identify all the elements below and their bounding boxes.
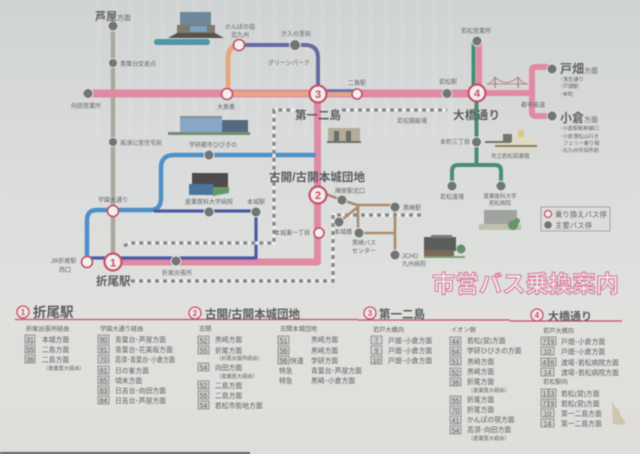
stop: Wakamatsu station xyxy=(442,88,452,98)
heading text 1: 折尾駅 xyxy=(33,304,74,320)
Gakuen Odori list: 学園大通り経由 xyxy=(100,325,143,333)
Furuhiraki Honjo danchi list: 古開本城団地 xyxy=(280,325,317,333)
timetable: section 4 Ohashi Dori xyxy=(510,309,622,428)
stop: Takasu housing xyxy=(108,138,118,146)
legend: 主要バス停 xyxy=(555,221,593,230)
stop: Gakken upper xyxy=(204,150,214,160)
Wakato bridge list: 10 xyxy=(373,358,380,365)
hub 2 Furuhiraki: 2 xyxy=(315,190,321,202)
Wakato bridge list: 若戸大橋向 xyxy=(543,327,574,335)
Furuhiraki Honjo danchi list: 黒崎方面 xyxy=(311,335,338,344)
stop label: Gakuen Odori: 学園大通り xyxy=(98,196,128,204)
stop: Honjobashi xyxy=(334,217,344,227)
stop: medical university xyxy=(204,207,214,217)
stop label: JCHO Kyushu xyxy=(402,254,426,268)
stop label: JR Orio xyxy=(51,257,76,274)
stop: Tobata xyxy=(547,64,557,74)
hub name: Daiichi Nishima: 第一二島 xyxy=(295,108,341,122)
stop: Kokura xyxy=(547,111,557,121)
Wakamatsu station list: 1 xyxy=(543,391,547,398)
stop label: University hospital: 若松病院 xyxy=(489,199,511,207)
Furuhiraki Honjo danchi list: 56 xyxy=(280,358,287,365)
Furuhiraki list: 55 xyxy=(200,393,207,400)
Purple route xyxy=(239,45,318,92)
icon: bridge xyxy=(487,77,528,88)
Furuhiraki list: 向田方面 xyxy=(215,363,242,372)
Aeon side list: 黒崎方面 xyxy=(467,357,494,366)
Kokura details: ･小倉駅新幹線口 xyxy=(560,124,599,132)
hub 3 Daiichi Nishima xyxy=(310,86,326,102)
Gakuen Odori list xyxy=(98,325,175,405)
Wakato bridge list xyxy=(541,327,619,377)
Orange section near Nishima xyxy=(322,93,355,96)
Furuhiraki Honjo danchi list: 学研方面 xyxy=(311,356,338,365)
Gakuen Odori list: 90 xyxy=(100,337,107,344)
transfer stop: Honjo Higashi xyxy=(314,228,324,238)
Aeon side list: 高須･向田方面 xyxy=(467,425,511,434)
Furuhiraki list: 52 xyxy=(200,338,207,345)
Furuhiraki list: 二島方面 xyxy=(215,381,242,390)
Furuhiraki list: 折尾方面 xyxy=(215,346,242,355)
Orio branch list: 折尾出張所経由 xyxy=(26,325,69,333)
Gakuen Odori list: 日の峯方面 xyxy=(115,366,149,375)
Furuhiraki list: 古開 xyxy=(199,325,211,333)
Lower dashed rail line xyxy=(131,215,422,281)
Aeon side list: 学研ひびきの方面 xyxy=(467,346,522,355)
stop label: Wakamatsu ferry: 若松渡場 xyxy=(440,193,464,201)
Furuhiraki Honjo danchi list: 特急 xyxy=(279,366,293,375)
Furuhiraki Honjo danchi list: 快速 xyxy=(290,356,304,365)
heading badge 3: 3 xyxy=(368,309,373,318)
building: Wakamatsu library xyxy=(485,130,537,152)
heading badge 2: 2 xyxy=(193,309,198,318)
Wakato bridge list: 4 xyxy=(543,360,547,367)
heading text 4: 大橋通り xyxy=(548,309,592,323)
stop: Aobadai xyxy=(108,58,118,68)
stop: Orio branch xyxy=(171,256,181,266)
timetable: section 3 Daiichi Nishima xyxy=(358,307,522,442)
building: Industrial medical university hospital xyxy=(189,173,229,196)
Wakamatsu station list: 3 xyxy=(551,391,555,398)
Orio branch list: 二島方面 xyxy=(42,345,69,354)
hub 4 Ohashi Dori: 4 xyxy=(474,88,481,100)
stop: JCHO xyxy=(390,250,400,260)
transfer stop: Nishima station xyxy=(352,89,362,99)
Furuhiraki list xyxy=(198,325,263,410)
hub name: Ohashi Dori: 大橋通り xyxy=(453,108,500,122)
stop: Kurosaki bus center xyxy=(354,228,364,238)
stop label: Wakamatsu depot: 若松営業所 xyxy=(461,27,491,35)
transfer stop: JR Orio west exit xyxy=(82,256,92,268)
direction: Tobata: 戸畑方面 xyxy=(560,62,598,76)
stop label: Green Park: グリーンパーク xyxy=(268,59,310,67)
stop label: Kurosaki bus center: 黒崎バス xyxy=(352,239,376,247)
stop label: Honmachi: 本町三丁目 xyxy=(440,138,470,146)
heading line 2 xyxy=(185,318,358,320)
Wakamatsu station list: 若松駅向 xyxy=(543,378,568,386)
hub name: Orio: 折尾駅 xyxy=(96,274,131,288)
heading badge 3 xyxy=(364,307,376,319)
Wakato bridge list: 14 xyxy=(544,370,551,377)
Aeon side list xyxy=(450,326,522,442)
Wakamatsu station list: 若松(営)方面 xyxy=(561,399,600,408)
stop label: Kurosaki bus center xyxy=(352,239,376,255)
Aeon side list: 70 xyxy=(452,408,459,415)
stop label: University hospital: 産業医科大学 xyxy=(483,192,517,200)
stop label: JR Orio: 西口 xyxy=(59,267,71,274)
Aeon side list: 54 xyxy=(452,428,459,435)
Gakuen Odori list: 日吉台･向田方面 xyxy=(115,386,166,395)
Furuhiraki Honjo danchi list: 特急 xyxy=(279,376,293,385)
stop label: University hospital xyxy=(483,192,517,207)
Kokura details: ･北九州市役所前 xyxy=(560,146,599,154)
Brown routes xyxy=(320,192,395,255)
Dark blue branch xyxy=(90,211,256,258)
Aeon side list: 55 xyxy=(452,398,459,405)
Wakamatsu station list: 第一二島方面 xyxy=(561,419,602,428)
Wakato bridge list: 7 xyxy=(543,339,547,346)
Gakuen Odori list: 日吉台･芦屋方面 xyxy=(115,396,166,405)
Furuhiraki list: 黒崎方面 xyxy=(215,335,242,344)
building: JCHO Kyushu hospital xyxy=(424,235,466,258)
building: Gakken Toshi Hibikino xyxy=(168,116,250,135)
Furuhiraki Honjo danchi list: 青葉台･芦屋方面 xyxy=(311,366,362,375)
heading line 1 xyxy=(15,318,185,320)
faded stripe texture xyxy=(95,0,465,135)
stop label: Kanbara north: 陣原駅北口 xyxy=(335,187,365,195)
Gakuen Odori list: 青葉台･花美坂方面 xyxy=(115,345,173,354)
stop: Aoba junction xyxy=(108,21,118,31)
Aeon side list: （産業医大経由） xyxy=(468,386,510,394)
Gakuen Odori list: 91 xyxy=(100,347,107,354)
heading badge 2 xyxy=(189,307,201,319)
heading badge 4: 4 xyxy=(535,311,540,320)
Tobata details xyxy=(560,75,584,98)
title: 市営バス乗換案内 xyxy=(432,271,619,297)
Furuhiraki list: 54 xyxy=(200,365,207,372)
Gakuen Odori list: 高須･青葉台･小倉方面 xyxy=(115,355,175,364)
stop label: Shionoiri: 汐入の里前 xyxy=(281,30,311,38)
stop label: Medical university: 産業医科大学病院 xyxy=(185,198,233,206)
stop label: Gakken Toshi: 学研都市ひびきの xyxy=(189,141,237,149)
stop label: Toshi Kosoku: 都市高速 xyxy=(521,101,545,109)
stop: Shionoiri xyxy=(290,40,300,50)
Pink route to depot and east xyxy=(479,42,550,116)
Aeon side list: 64 xyxy=(452,349,459,356)
Furuhiraki Honjo danchi list: 黒崎･小倉方面 xyxy=(311,376,355,385)
Wakato bridge list xyxy=(371,326,432,365)
Wakamatsu station list: 7 xyxy=(543,401,547,408)
bottom edge shadow xyxy=(0,452,250,454)
Furuhiraki Honjo danchi list: 51 xyxy=(280,338,287,345)
Furuhiraki list: 二島方面 xyxy=(215,391,242,400)
timetable: section 2 Furuhiraki xyxy=(185,307,362,410)
Gakuen Odori list: 83 xyxy=(100,388,107,395)
Orio branch list: 本城方面 xyxy=(42,335,69,344)
torn paper mark xyxy=(612,400,626,425)
direction: Kokura: 小倉方面 xyxy=(560,110,598,125)
Orio branch list: 36 xyxy=(26,357,34,364)
Wakato bridge list: 戸畑･小倉方面 xyxy=(561,337,605,346)
Gakuen Odori list: 84 xyxy=(100,398,107,405)
Wakato bridge list: 6 xyxy=(551,360,555,367)
stop label: Kanbo no Yado: かんぽの宿 xyxy=(225,23,255,31)
Aeon side list: 52 xyxy=(452,370,459,377)
direction label: Ashiya: 芦屋方面 xyxy=(95,9,131,23)
stop label: Kurosaki bus center: センター xyxy=(352,247,376,255)
stop label: Honjo station: 本城駅 xyxy=(247,198,265,206)
Tobata details: ･浅生通り xyxy=(560,75,584,83)
stop label: JCHO Kyushu: JCHO xyxy=(402,254,419,260)
Wakato bridge list: 渡場･若松病院方面 xyxy=(561,358,619,367)
heading line 3 xyxy=(358,319,510,321)
stop: Honmachi xyxy=(472,137,482,147)
stop label: Orio branch: 折尾出張所 xyxy=(162,269,192,277)
Wakato bridge list: 9 xyxy=(375,348,379,355)
Aeon side list: 折尾方面 xyxy=(467,405,494,414)
Blue route xyxy=(87,155,314,262)
Aeon side list: 44 xyxy=(452,339,459,346)
Furuhiraki list: 若松市街地方面 xyxy=(215,401,263,410)
Furuhiraki list: （産業医大経由） xyxy=(216,372,258,380)
stop label: Honjo Higashi: 本城東一丁目 xyxy=(274,229,310,237)
Furuhiraki Honjo danchi list: 56 xyxy=(280,348,287,355)
Aeon side list: （産業医大経由） xyxy=(468,434,510,442)
stop: Honjo station xyxy=(251,207,261,217)
Wakato bridge list: 若戸大橋向 xyxy=(373,326,404,334)
Aeon side list: 若松(営)方面 xyxy=(467,336,506,345)
Aeon side list: イオン側 xyxy=(451,326,476,334)
hub 1 Orio: 1 xyxy=(110,258,116,270)
Wakato bridge list: 10 xyxy=(544,349,551,356)
legend: transfer stop xyxy=(544,210,552,218)
heading line 4 xyxy=(510,320,622,322)
stop label: JCHO Kyushu: 九州病院 xyxy=(402,260,426,268)
heading badge 1: 1 xyxy=(21,308,26,317)
Gakuen Odori list: 頃末方面 xyxy=(115,376,142,385)
heading text 3: 第一二島 xyxy=(379,307,425,321)
Kokura details: フェリー乗り場 xyxy=(563,139,599,147)
stop: Mukaida depot xyxy=(83,88,93,98)
Aeon side list: 41 xyxy=(452,418,459,425)
Furuhiraki Honjo danchi list: 黒崎方面 xyxy=(311,346,338,355)
Furuhiraki list: 54 xyxy=(200,403,207,410)
Upper dashed rail line xyxy=(124,110,294,246)
stop: Kanbara north xyxy=(337,195,347,205)
Wakamatsu station list: 第一二島方面 xyxy=(561,409,602,418)
stop label: Wakamatsu Kyotei: 若松競艇場 xyxy=(397,117,427,125)
Kokura details: ･小倉港松山行き xyxy=(560,132,599,140)
Stripe section near Nishima xyxy=(322,89,355,92)
Orio branch list: （産業医大経由） xyxy=(43,364,85,372)
Wakato bridge list: 7 xyxy=(375,338,379,345)
stop label: Library: 市立若松図書館 xyxy=(491,152,530,160)
legend: main stop xyxy=(544,221,552,229)
Wakato bridge list: 9 xyxy=(551,339,555,346)
Gakuen Odori list: 81 xyxy=(100,368,107,375)
building: Kanbo no Yado xyxy=(154,12,224,45)
Furuhiraki Honjo danchi list xyxy=(278,325,362,385)
legend xyxy=(541,207,610,231)
Wakamatsu station list: 14 xyxy=(544,421,551,428)
Aeon side list: 折尾方面 xyxy=(467,395,494,404)
stop label: Kitakyushu: 北九州 xyxy=(231,31,249,39)
stop label: Mukaida: 向田営業所 xyxy=(71,102,101,110)
heading badge 1 xyxy=(17,306,29,318)
Orio branch list: 31 xyxy=(26,337,34,344)
hub 2 Furuhiraki xyxy=(310,186,326,204)
route map xyxy=(51,9,619,297)
Wakato bridge list: 戸畑･小倉方面 xyxy=(561,347,605,356)
hub 3 Daiichi Nishima: 3 xyxy=(315,89,321,101)
Furuhiraki list: （折尾出張所経由） xyxy=(216,354,263,362)
Tobata details: ･幸町 xyxy=(560,91,574,98)
Wakamatsu station list xyxy=(541,378,602,428)
stop label: Nishima station: 二島駅 xyxy=(348,79,366,87)
Furuhiraki list: 55 xyxy=(200,348,207,355)
stop label: JR Orio: JR折尾駅 xyxy=(51,257,76,265)
Aeon side list: 黒崎方面 xyxy=(467,367,494,376)
Gakuen Odori list: 青葉台･芦屋方面 xyxy=(115,335,166,344)
Gakuen Odori list: 85 xyxy=(100,378,107,385)
Wakato bridge list: 戸畑･小倉方面 xyxy=(388,356,432,365)
stop: Wakamatsu depot xyxy=(472,36,482,46)
stop label: Takasu: 高須公営住宅前 xyxy=(120,139,162,147)
legend: 乗り換えバス停 xyxy=(555,210,607,219)
stop label: Oshima: 大島東 xyxy=(217,103,235,111)
Wakamatsu station list: 9 xyxy=(551,401,555,408)
Wakamatsu station list: 10 xyxy=(544,411,551,418)
Aeon side list: 36 xyxy=(452,380,459,387)
stop: Wakamatsu ferry xyxy=(447,181,457,191)
stop label: Wakamatsu station: 若松駅 xyxy=(439,78,457,86)
building: Nishima facility xyxy=(327,128,361,143)
Aeon side list: かんぽの宿方面 xyxy=(467,415,515,424)
Aeon side list: 51 xyxy=(452,359,459,366)
Furuhiraki list: 52 xyxy=(200,383,207,390)
heading text 2: 古開/古開本城団地 xyxy=(205,307,300,321)
Orio branch list: 55 xyxy=(26,347,34,354)
Pink main east-west route xyxy=(93,90,480,98)
Green route xyxy=(452,42,501,186)
stop label: Honjobashi: 本城橋 xyxy=(334,228,352,236)
stop label: Kurosaki station: 黒崎駅 xyxy=(403,204,421,212)
transfer stop: Kanbo no Yado xyxy=(234,40,244,50)
Wakamatsu station list: 若松(営)方面 xyxy=(561,389,600,398)
Aeon side list: 折尾方面 xyxy=(467,377,494,386)
Orange route xyxy=(228,45,318,94)
transfer stop: Gakuen Odori xyxy=(108,206,118,216)
hub 1 Orio xyxy=(104,254,122,270)
stop: Kurosaki station xyxy=(390,202,400,212)
Kokura details xyxy=(560,124,599,154)
transfer stop: Oshima xyxy=(222,88,232,100)
stop label: Aobadai: 青葉台交差点 xyxy=(120,60,156,68)
hub name: Furuhiraki: 古開/古開本城団地 xyxy=(269,170,366,184)
Pink vertical route xyxy=(123,94,318,262)
Gakuen Odori list: 70 xyxy=(100,357,107,364)
Wakato bridge list: 戸畑･小倉方面 xyxy=(388,346,432,355)
Wakato bridge list: 戸畑･小倉方面 xyxy=(388,336,432,345)
Orio branch list: 二島方面 xyxy=(42,355,69,364)
building: Wakamatsu hospital xyxy=(479,210,521,230)
Wakato bridge list: 渡場･若松病院方面 xyxy=(561,368,619,377)
hub 4 Ohashi Dori xyxy=(468,84,486,102)
Orio branch list xyxy=(25,325,85,372)
Tobata details: ･戸畑駅 xyxy=(560,82,579,90)
Ashiya gray route line xyxy=(111,26,115,252)
timetable: section 1 Orio xyxy=(15,304,185,405)
Wakamatsu dashed rail line xyxy=(342,108,447,112)
stop: University Wakamatsu hospital xyxy=(496,181,506,191)
